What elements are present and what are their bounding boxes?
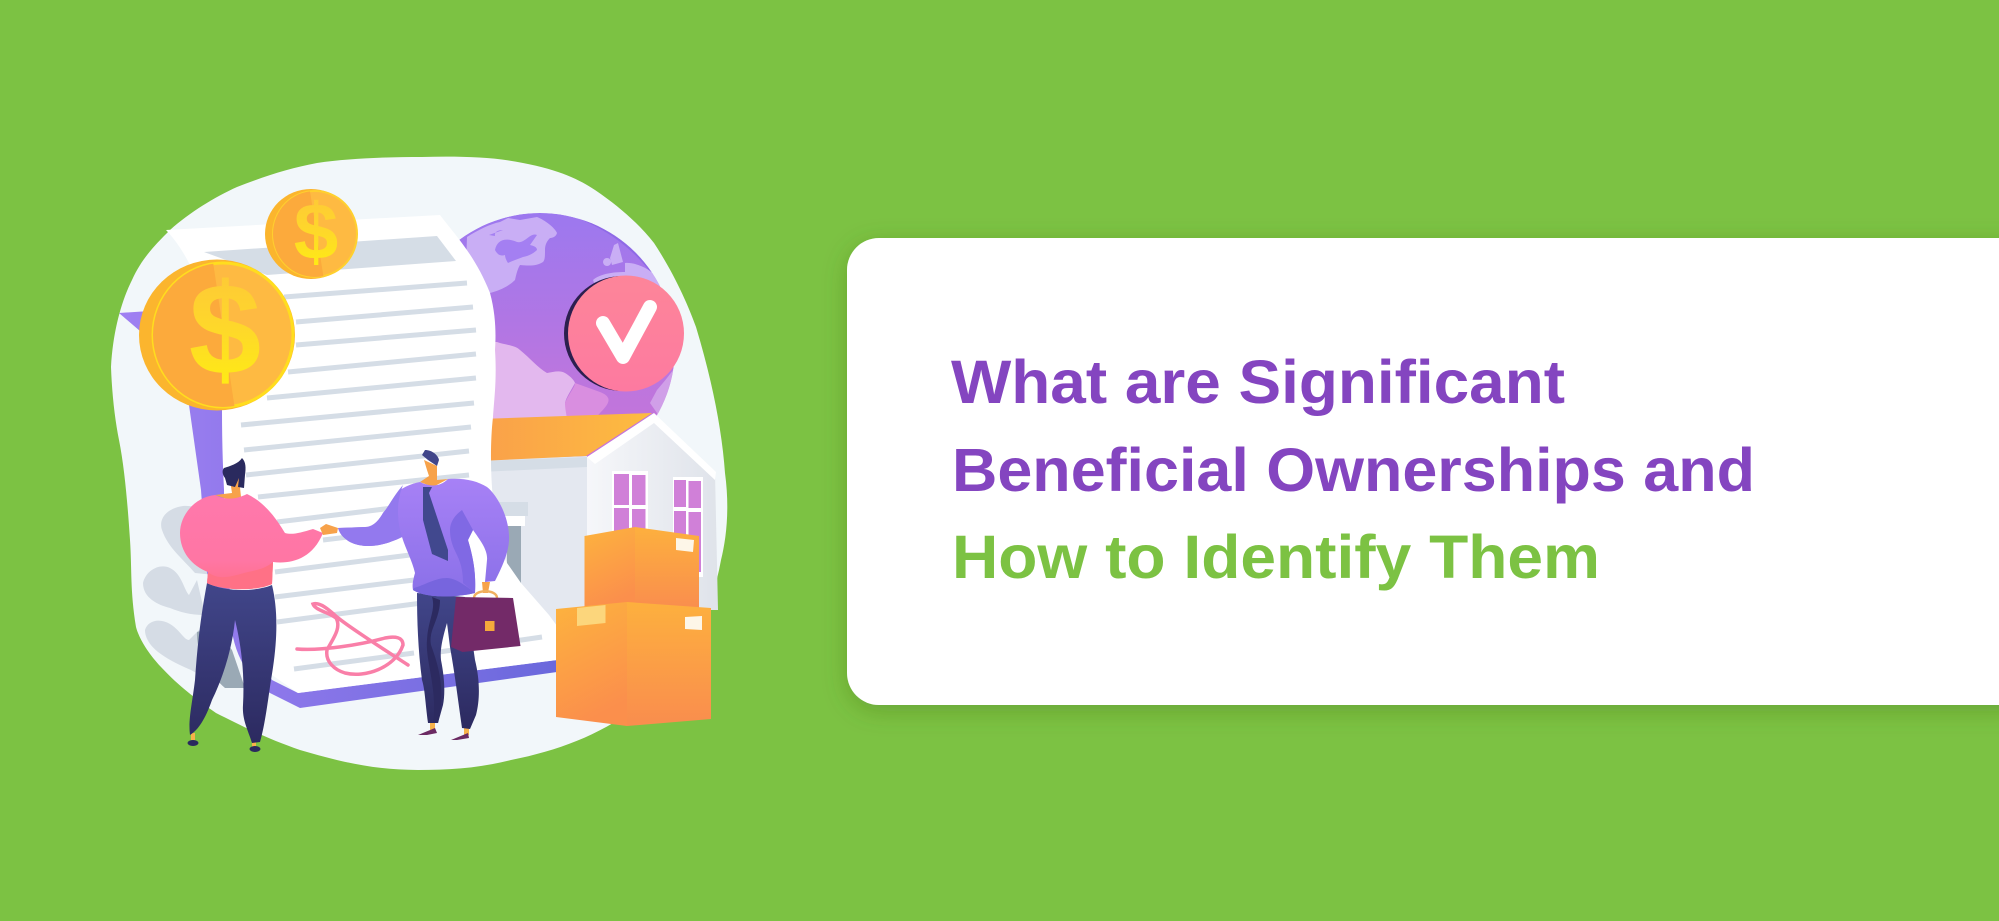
paper header bar (204, 236, 456, 275)
title text: How to Identify Them (952, 523, 1600, 591)
right man hair (422, 450, 439, 466)
box: bottom (556, 602, 711, 726)
right man shoes (418, 728, 469, 740)
title card (847, 238, 1999, 705)
small coin: $ (294, 187, 338, 276)
roof (480, 413, 652, 461)
right man tie (423, 487, 448, 561)
box: top (584, 527, 699, 610)
window right (673, 477, 703, 577)
house front (587, 415, 718, 610)
title text (951, 348, 1755, 591)
check badge (564, 276, 684, 392)
grey foliage (143, 506, 241, 687)
right man sweater (338, 479, 509, 596)
right man left sleeve shade (338, 485, 403, 546)
person: right man (338, 450, 509, 740)
foliage shadow (197, 631, 245, 688)
handshake hand (320, 524, 338, 535)
backdrop blob (111, 157, 727, 770)
small coin (260, 185, 357, 280)
left man ankles (191, 733, 256, 747)
infographic canvas (111, 156, 1999, 770)
paper text lines (241, 283, 542, 669)
right man ankles (430, 722, 469, 735)
signature (297, 604, 408, 674)
right man neck and face (420, 460, 448, 487)
right man sweater shade (450, 510, 475, 593)
large coin (139, 255, 295, 410)
person: left man (180, 458, 323, 752)
left man trousers (189, 583, 276, 743)
document folder (119, 311, 557, 708)
left man sweater (180, 494, 323, 589)
left man hair and beard (223, 458, 246, 488)
document paper (166, 215, 560, 693)
house side wall (480, 456, 587, 640)
right man hand (482, 582, 490, 593)
right man trousers (417, 593, 479, 729)
illustration: deal signing (111, 157, 727, 770)
title text: Beneficial Ownerships and (952, 436, 1755, 504)
left man shoes (188, 740, 260, 752)
left man neck (215, 478, 241, 500)
briefcase (451, 591, 520, 652)
left man sweater fold (207, 562, 273, 589)
right man trouser shade (427, 597, 441, 723)
globe (460, 213, 674, 458)
right man sweater fold (413, 578, 475, 596)
large coin: $ (189, 256, 261, 402)
window left (612, 471, 648, 541)
house door (494, 502, 528, 584)
title text: What are Significant (951, 348, 1565, 416)
house (480, 413, 718, 640)
